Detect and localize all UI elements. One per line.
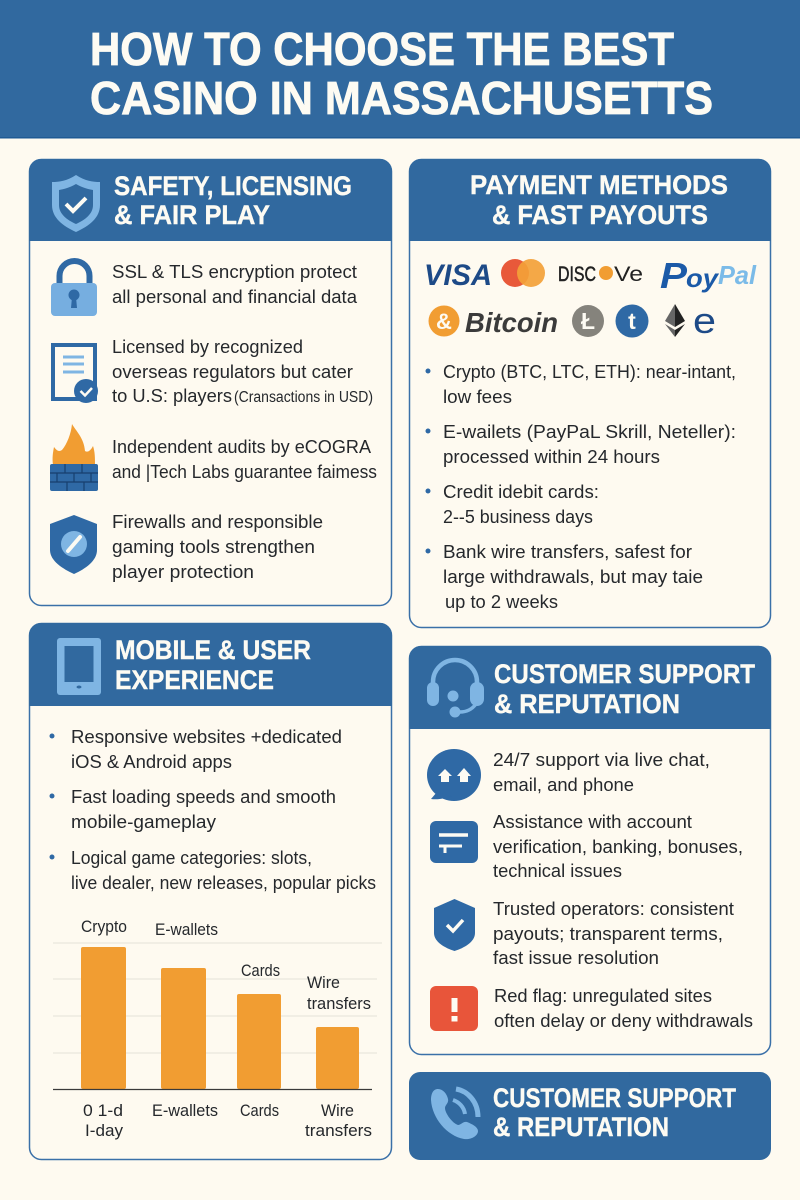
text: encryption: SSL & TLS encryption protect xyxy=(112,261,357,282)
list: payout speeds: processed within 24 hours xyxy=(443,446,660,467)
text: trusted operators: fast issue resolution xyxy=(493,947,659,968)
list: payout speeds: large withdrawals, but may taie xyxy=(443,566,703,587)
text: trusted operators: Trusted operators: consistent xyxy=(493,898,734,919)
icon: shield with check xyxy=(52,175,100,232)
chart axis labels: 0 1-d xyxy=(83,1102,123,1120)
logo: letter e: e xyxy=(693,300,716,341)
list: payout speeds: Bank wire transfers, safest for xyxy=(443,541,692,562)
list: mobile features: mobile-gameplay xyxy=(71,811,217,832)
chart labels above bars: transfers xyxy=(307,995,371,1013)
heading: customer support: CUSTOMER SUPPORT xyxy=(494,659,755,689)
title banner xyxy=(0,0,800,138)
text: red flag: Red flag: unregulated sites xyxy=(494,985,712,1006)
panel: payment methods and fast payouts xyxy=(409,159,771,628)
icon: headset xyxy=(427,660,484,718)
logo: Discover: Ve xyxy=(614,263,643,286)
chart labels above bars: Wire xyxy=(307,974,340,992)
heading: customer support: CUSTOMER SUPPORT xyxy=(493,1083,736,1113)
list: mobile features: live dealer, new releases, popular picks xyxy=(71,872,376,893)
heading: fast payouts: & FAST PAYOUTS xyxy=(492,200,708,230)
icon: message card xyxy=(430,821,478,863)
bar: cards xyxy=(237,994,281,1089)
logo: Bitcoin xyxy=(428,306,558,338)
icon: trust shield xyxy=(434,899,475,951)
text: audits: and |Tech Labs guarantee faimess xyxy=(112,461,377,482)
text: licensing xyxy=(112,336,373,406)
text: 24/7 support xyxy=(493,749,710,795)
logo: Ethereum xyxy=(665,304,685,337)
text: 24/7 support: email, and phone xyxy=(493,774,634,795)
chart labels above bars xyxy=(81,918,371,1013)
list: mobile features xyxy=(50,726,376,893)
chart axis labels: Cards xyxy=(240,1102,279,1120)
heading: reputation: & REPUTATION xyxy=(493,1112,669,1142)
logo: PayPal: P xyxy=(660,255,688,296)
text: firewalls: gaming tools strengthen xyxy=(112,536,315,557)
icon: tablet xyxy=(57,638,101,695)
list: mobile features: iOS & Android apps xyxy=(71,751,232,772)
text: licensing: Licensed by recognized xyxy=(112,336,303,357)
list: payout speeds: up to 2 weeks xyxy=(445,591,558,612)
text: firewalls: player protection xyxy=(112,561,254,582)
logo: Tether style coin: t xyxy=(628,308,636,334)
heading: reputation: & REPUTATION xyxy=(494,689,680,719)
logo: PayPal: oy xyxy=(686,263,720,293)
chart labels above bars: Cards xyxy=(241,962,280,980)
logo: Discover: DISC xyxy=(558,263,596,286)
bar: crypto xyxy=(81,947,126,1089)
chart axis labels: E-wallets xyxy=(152,1102,218,1120)
list: payout speeds: Credit idebit cards: xyxy=(443,481,599,502)
text: 24/7 support: 24/7 support via live chat, xyxy=(493,749,710,770)
text: assistance: Assistance with account xyxy=(493,811,692,832)
list: payout speeds xyxy=(426,361,736,612)
bar: e-wallets xyxy=(161,968,206,1089)
panel: mobile and user experience xyxy=(29,623,392,1160)
logo: Visa: VISA xyxy=(424,259,492,292)
text: assistance xyxy=(493,811,743,881)
text: encryption xyxy=(112,261,358,307)
heading: fair play: & FAIR PLAY xyxy=(114,200,270,230)
chart labels above bars: Crypto xyxy=(81,918,127,936)
list: mobile features: Responsive websites +dedicated xyxy=(71,726,342,747)
text: audits: Independent audits by eCOGRA xyxy=(112,436,372,457)
chart axis labels: Wire xyxy=(321,1102,354,1120)
logo: Bitcoin: & xyxy=(436,309,452,334)
title banner: CASINO IN MASSACHUSETTS xyxy=(90,72,713,124)
text: licensing: overseas regulators but cater xyxy=(112,361,353,382)
icon: licence document xyxy=(53,345,98,403)
icon: responsible gaming shield xyxy=(50,515,97,574)
list: mobile features: Logical game categories: slots, xyxy=(71,847,312,868)
icon: chat bubble xyxy=(427,749,481,801)
text: firewalls xyxy=(112,511,323,582)
text: licensing: (Cransactions in USD) xyxy=(234,389,373,406)
bar chart: payout speed xyxy=(53,918,382,1140)
text: encryption: all personal and financial data xyxy=(112,286,358,307)
chart axis labels xyxy=(83,1102,372,1140)
logo: Discover xyxy=(558,263,643,286)
text: assistance: verification, banking, bonuses, xyxy=(493,836,743,857)
logo: Bitcoin: Bitcoin xyxy=(465,307,558,338)
panel: customer support banner xyxy=(409,1072,771,1160)
heading: experience: EXPERIENCE xyxy=(115,665,274,695)
text: trusted operators: payouts; transparent terms, xyxy=(493,923,723,944)
title banner: HOW TO CHOOSE THE BEST xyxy=(90,23,674,75)
list: payout speeds: low fees xyxy=(443,386,512,407)
list: mobile features: Fast loading speeds and smooth xyxy=(71,786,336,807)
icon: phone xyxy=(431,1089,478,1139)
list: payout speeds: Crypto (BTC, LTC, ETH): near-intant, xyxy=(443,361,736,382)
text: trusted operators xyxy=(493,898,734,968)
logo: PayPal xyxy=(660,255,757,296)
text: red flag: often delay or deny withdrawals xyxy=(494,1010,753,1031)
chart axis labels: transfers xyxy=(305,1122,372,1140)
panel: customer support and reputation xyxy=(409,646,771,1054)
text: assistance: technical issues xyxy=(493,860,622,881)
icon: red flag warning xyxy=(430,986,478,1031)
icon: padlock xyxy=(51,261,97,316)
text: audits xyxy=(112,436,377,482)
icon: firewall xyxy=(50,424,98,491)
text: red flag xyxy=(494,985,753,1031)
chart axis labels: I-day xyxy=(85,1122,124,1140)
text: firewalls: Firewalls and responsible xyxy=(112,511,323,532)
bar: wire transfers xyxy=(316,1027,359,1089)
logo: Mastercard xyxy=(501,259,545,287)
logo: PayPal: Pal xyxy=(718,260,757,290)
heading: mobile: MOBILE & USER xyxy=(115,635,311,665)
heading: safety: SAFETY, LICENSING xyxy=(114,171,352,201)
logo: Litecoin: Ł xyxy=(581,308,595,334)
panel: safety, licensing and fair play xyxy=(29,159,392,606)
logo: Litecoin xyxy=(572,305,604,337)
heading: payment methods: PAYMENT METHODS xyxy=(470,170,728,200)
logo: Tether style coin xyxy=(616,304,648,338)
list: payout speeds: 2--5 business days xyxy=(443,506,593,527)
list: payout speeds: E-wailets (PayPaL Skrill, Neteller): xyxy=(443,421,736,442)
chart labels above bars: E-wallets xyxy=(155,921,218,939)
text: licensing: to U.S: players xyxy=(112,385,232,406)
